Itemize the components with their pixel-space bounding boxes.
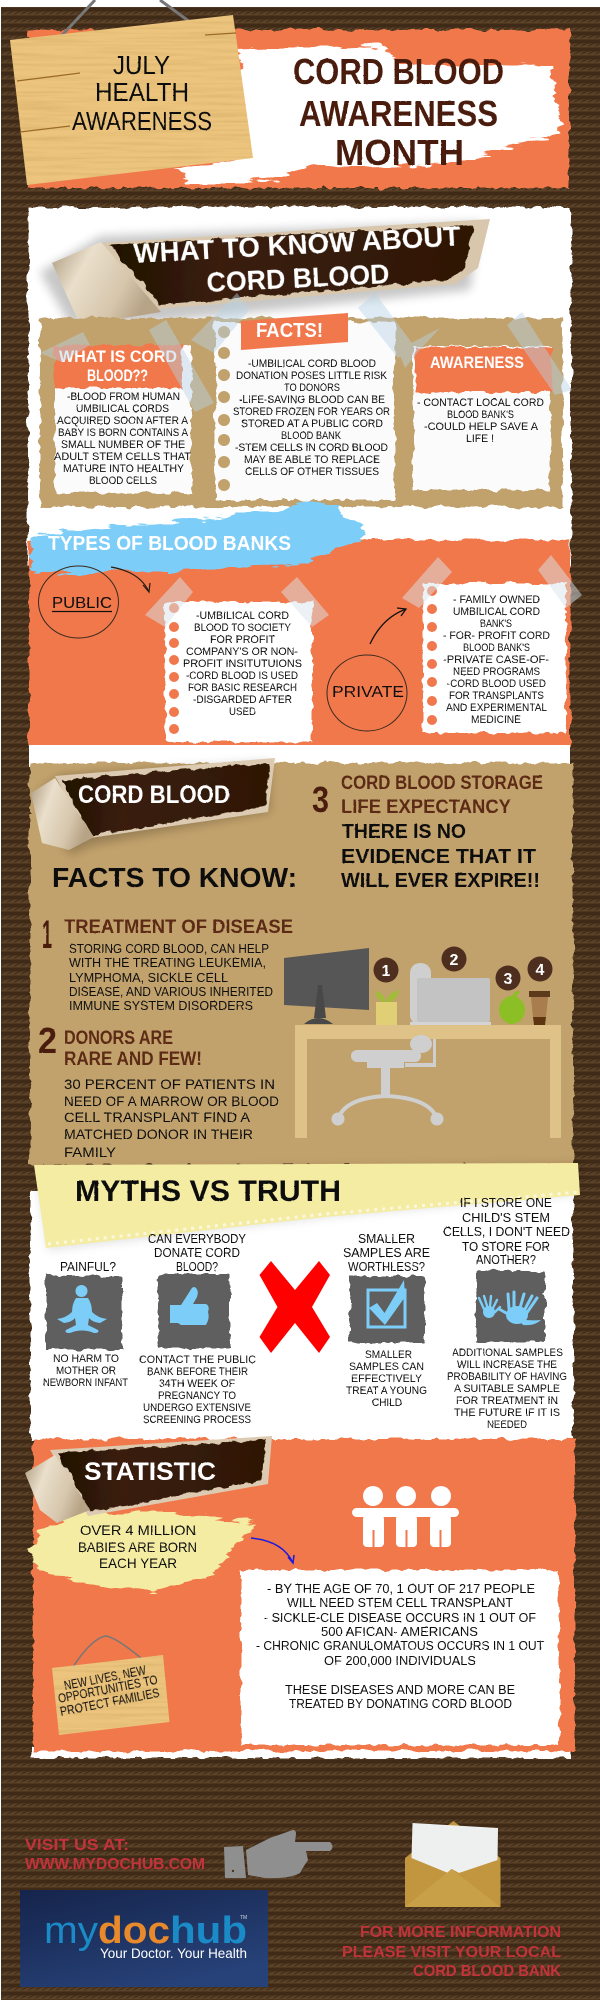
card: private: FOR TRANSPLANTS (449, 690, 544, 702)
small wooden sign: PROTECT FAMILIES (59, 1686, 161, 1719)
public circle (38, 566, 118, 638)
myth 4: one child's stem cells (443, 1195, 570, 1431)
tapes on private card (402, 555, 582, 608)
yellow notepaper heading: MYTHS VS TRUTH (75, 1175, 341, 1208)
myth 3: smaller samples: SAMPLES CAN (349, 1361, 424, 1373)
banner: cord blood: CORD BLOOD (78, 781, 230, 809)
card: what is cord blood: ACQUIRED SOON AFTER A (57, 415, 189, 427)
panel: statistics box: - CHRONIC GRANULOMATOUS OCCURS IN 1 OUT (256, 1638, 544, 1653)
myth 2: can everybody donate: CONTACT THE PUBLIC (139, 1354, 256, 1366)
icon: hands (476, 1271, 545, 1342)
card: public: -DISGARDED AFTER (193, 694, 292, 706)
logo: mydochub: Your Doctor. Your Health (100, 1945, 247, 1961)
card: what is cord blood: BABY IS BORN CONTAINS A (58, 427, 189, 439)
myth 1: painful: NO HARM TO (53, 1353, 119, 1365)
card: what is cord blood: -BLOOD FROM HUMAN (67, 391, 180, 403)
card: public: USED (229, 706, 256, 718)
fact 2: donors are rare and few: CELL TRANSPLANT FIND A (64, 1109, 251, 1125)
banner heading text: WHAT TO KNOW ABOUT (133, 220, 461, 269)
panel: statistics box: WILL NEED STEM CELL TRANSPLANT (287, 1595, 513, 1610)
section: statistic (25, 1436, 575, 1758)
icon: red X (260, 1261, 330, 1353)
myth 3: smaller samples: WORTHLESS? (348, 1259, 425, 1274)
logo: mydochub: hub (170, 1910, 247, 1952)
card: private: BANK'S (480, 618, 512, 630)
card: awareness: AWARENESS (430, 353, 524, 372)
myth 4: one child's stem cells: WILL INCREASE THE (457, 1359, 557, 1371)
sign text: july health awareness: HEALTH (95, 77, 189, 107)
fact 1: treatment of disease: IMMUNE SYSTEM DISORDERS (69, 999, 253, 1013)
panel: statistics box: TREATED BY DONATING CORD BLOOD (289, 1696, 512, 1711)
card: what is cord blood: BLOOD?? (87, 366, 148, 385)
number badges: 2 (450, 952, 459, 969)
card: public: -CORD BLOOD IS USED (186, 670, 298, 682)
panel: statistics box: - SICKLE-CLE DISEASE OCCURS IN 1 OUT OF (264, 1610, 536, 1625)
desk illustration (284, 946, 561, 1138)
myth 2: can everybody donate: 34TH WEEK OF (159, 1378, 235, 1390)
icon: plant (375, 990, 399, 1025)
header white brush (172, 45, 562, 183)
myth 3: smaller samples: CHILD (372, 1397, 402, 1409)
callout: over 4 million babies: BABIES ARE BORN (78, 1539, 197, 1555)
card: facts: BLOOD BANK (281, 430, 342, 442)
myth 3: smaller samples: SMALLER (365, 1349, 412, 1361)
myth 4: one child's stem cells: TO STORE FOR (462, 1239, 550, 1254)
card: private: -CORD BLOOD USED (447, 678, 546, 690)
header panel (10, 0, 569, 188)
myth 2: can everybody donate (139, 1231, 256, 1426)
fact 3: storage life expectancy: EVIDENCE THAT IT (341, 846, 536, 868)
fact 2: donors are rare and few: DONORS ARE (64, 1028, 173, 1049)
myth 1: painful: MOTHER OR (56, 1365, 116, 1377)
blue brush heading: TYPES OF BLOOD BANKS (48, 533, 291, 555)
wooden sign (10, 0, 253, 185)
card: private: BLOOD BANK'S (463, 642, 530, 654)
title: cord blood awareness month: CORD BLOOD (293, 51, 504, 92)
card: facts: TO DONORS (284, 382, 340, 394)
myth 4: one child's stem cells: PROBABILITY OF HAVING (447, 1371, 567, 1383)
fact 1: treatment of disease: LYMPHOMA, SICKLE CELL (69, 971, 228, 985)
banner: statistic (25, 1436, 272, 1523)
card: awareness: LIFE ! (466, 433, 494, 445)
icon: checkbox (350, 1276, 425, 1343)
myth 3: smaller samples: TREAT A YOUNG (346, 1385, 427, 1397)
card: awareness: -COULD HELP SAVE A (424, 421, 539, 433)
fact 1: treatment of disease (42, 913, 293, 1013)
desk (295, 1025, 561, 1138)
tapes on public card (145, 577, 329, 627)
banner heading text: CORD BLOOD (206, 258, 390, 298)
card: facts: MAY BE ABLE TO REPLACE (244, 454, 380, 466)
callout: over 4 million babies: OVER 4 MILLION (80, 1522, 196, 1538)
white main panel (28, 207, 571, 567)
panel: statistics box (241, 1570, 559, 1745)
card: facts: -STEM CELLS IN CORD BLOOD (235, 442, 388, 454)
blue brush heading (31, 505, 367, 572)
white background (30, 1190, 573, 1440)
fact 2: donors are rare and few: FAMILY (64, 1144, 117, 1160)
callout: over 4 million babies: EACH YEAR (99, 1555, 177, 1571)
icon: apple (499, 991, 525, 1024)
panel: statistics box: THESE DISEASES AND MORE CAN BE (285, 1682, 515, 1697)
more information text: FOR MORE INFORMATION (360, 1924, 561, 1941)
visit us text (25, 1837, 205, 1873)
panel: statistics box: - BY THE AGE OF 70, 1 OUT OF 217 PEOPLE (267, 1581, 535, 1596)
more information text: CORD BLOOD BANK (413, 1963, 561, 1980)
card: private: UMBILICAL CORD (453, 606, 540, 618)
panel: statistics box: 500 AFICAN- AMERICANS (321, 1624, 478, 1639)
fact 3: storage life expectancy: THERE IS NO (342, 821, 466, 843)
card: public: PROFIT INSITUTUIONS (183, 658, 302, 670)
card: public: COMPANY'S OR NON- (186, 646, 298, 658)
yellow notepaper heading (34, 1163, 580, 1250)
logo: mydochub: my (44, 1910, 98, 1952)
small wooden sign (52, 1636, 170, 1735)
myth 4: one child's stem cells: NEEDED (487, 1419, 527, 1431)
myth 2: can everybody donate: PREGNANCY TO (158, 1390, 236, 1402)
myth 4: one child's stem cells: A SUITABLE SAMPLE (454, 1383, 560, 1395)
private circle: PRIVATE (332, 684, 404, 701)
fact 1: treatment of disease: DISEASE, AND VARIOUS INHERITED (69, 985, 273, 999)
card: facts: STORED FROZEN FOR YEARS OR (233, 406, 390, 418)
icon: coffee cup (529, 991, 550, 1025)
card: public: BLOOD TO SOCIETY (194, 622, 292, 634)
arrow: private to card (370, 608, 406, 644)
fact 3: storage life expectancy: 3 (312, 779, 329, 820)
panel: tan facts board (40, 293, 572, 507)
visit us text: VISIT US AT: (25, 1837, 129, 1854)
number badges (374, 946, 552, 990)
card: what is cord blood: BLOOD CELLS (89, 475, 157, 487)
fact 2: donors are rare and few: MATCHED DONOR IN THEIR (64, 1126, 253, 1142)
white bottom edge (31, 1745, 571, 1758)
card: public: FOR BASIC RESEARCH (188, 682, 297, 694)
white strip (29, 745, 570, 767)
myth 3: smaller samples: SAMPLES ARE (343, 1245, 430, 1260)
card: private (423, 583, 566, 733)
card: private: - FOR- PROFIT CORD (443, 630, 550, 642)
myth 2: can everybody donate: SCREENING PROCESS (143, 1414, 251, 1426)
myth 1: painful (43, 1259, 128, 1389)
myth 4: one child's stem cells: IF I STORE ONE (460, 1195, 552, 1210)
title: cord blood awareness month: MONTH (335, 132, 464, 173)
fact 1: treatment of disease: WITH THE TREATING LEUKEMIA, (69, 956, 266, 970)
fact 1: treatment of disease: TREATMENT OF DISEASE (64, 917, 293, 938)
card: private: NEED PROGRAMS (453, 666, 540, 678)
fact 3: storage life expectancy: CORD BLOOD STORAGE (341, 773, 543, 794)
card: what is cord blood: WHAT IS CORD (59, 347, 177, 366)
heading: facts to know: FACTS TO KNOW: (52, 862, 297, 893)
myth 4: one child's stem cells: CHILD'S STEM (462, 1210, 550, 1225)
section: types of blood banks (29, 505, 582, 747)
myth 3: smaller samples (343, 1231, 430, 1409)
myth 4: one child's stem cells: CELLS, I DON'T NEED (443, 1224, 570, 1239)
visit us text: WWW.MYDOCHUB.COM (25, 1856, 205, 1873)
orange background (33, 1439, 575, 1751)
panel: statistics box: OF 200,000 INDIVIDUALS (324, 1653, 476, 1668)
title: cord blood awareness month (293, 51, 504, 173)
more information text (342, 1924, 561, 1980)
myth 1: painful: PAINFUL? (60, 1259, 116, 1274)
small wooden sign: NEW LIVES, NEW (63, 1663, 147, 1693)
card: awareness (413, 346, 552, 490)
myth 3: smaller samples: SMALLER (358, 1231, 415, 1246)
notebook holes (218, 326, 230, 491)
more information text: PLEASE VISIT YOUR LOCAL (342, 1944, 561, 1961)
fact 1: treatment of disease: STORING CORD BLOOD, CAN HELP (69, 942, 269, 956)
arrow: blue (251, 1538, 294, 1563)
card: private: - FAMILY OWNED (453, 594, 540, 606)
fact 3: storage life expectancy: LIFE EXPECTANCY (341, 797, 511, 818)
card: awareness: - CONTACT LOCAL CORD (417, 397, 544, 409)
title: cord blood awareness month: AWARENESS (299, 93, 498, 134)
icon: three people (352, 1486, 459, 1548)
card: public: -UMBILICAL CORD (196, 610, 289, 622)
card: private: AND EXPERIMENTAL (446, 702, 547, 714)
card: what is cord blood (54, 345, 191, 493)
icon: meditation (46, 1276, 122, 1350)
yellow brush (29, 1512, 256, 1593)
card: what is cord blood: MATURE INTO HEALTHY (63, 463, 185, 475)
callout: over 4 million babies (78, 1522, 197, 1571)
banner: statistic: STATISTIC (84, 1458, 216, 1486)
myth 3: smaller samples: EFFECTIVELY (351, 1373, 423, 1385)
logo: mydochub: doc (98, 1910, 170, 1952)
chair (332, 1035, 444, 1126)
sign text: july health awareness: AWARENESS (72, 106, 212, 136)
card: what is cord blood: SMALL NUMBER OF THE (61, 439, 185, 451)
card: facts (215, 313, 394, 500)
orange background (29, 540, 570, 747)
sign text: july health awareness: JULY (113, 50, 170, 80)
banner: what to know about cord blood (40, 219, 490, 325)
fact 2: donors are rare and few: 30 PERCENT OF PATIENTS IN (64, 1076, 275, 1092)
myth 1: painful: NEWBORN INFANT (43, 1377, 128, 1389)
fact 3: storage life expectancy (312, 773, 543, 892)
banner: cord blood (31, 758, 275, 855)
card: public: FOR PROFIT (210, 634, 275, 646)
myth 2: can everybody donate: DONATE CORD (154, 1245, 240, 1260)
myth 2: can everybody donate: CAN EVERYBODY (148, 1231, 246, 1246)
number badges: 4 (536, 962, 545, 979)
fact 1: treatment of disease: 1 (42, 913, 52, 957)
card: what is cord blood: UMBILICAL CORDS (76, 403, 169, 415)
card: private: MEDICINE (471, 714, 521, 726)
header orange brush (28, 30, 569, 188)
myth 2: can everybody donate: BLOOD? (176, 1259, 218, 1274)
sign text: july health awareness (72, 50, 212, 136)
footer (20, 1821, 561, 1987)
myth 4: one child's stem cells: FOR TREATMENT IN (456, 1395, 558, 1407)
card: what is cord blood: ADULT STEM CELLS THAT (54, 451, 191, 463)
card: facts: CELLS OF OTHER TISSUES (245, 466, 379, 478)
facts tag (241, 313, 348, 350)
logo: mydochub: TM (240, 1915, 247, 1921)
myth 2: can everybody donate: BANK BEFORE THEIR (147, 1366, 248, 1378)
myth 4: one child's stem cells: ADDITIONAL SAMPLES (452, 1347, 563, 1359)
fact 3: storage life expectancy: WILL EVER EXPIRE!! (341, 870, 540, 892)
card: private: -PRIVATE CASE-OF- (443, 654, 549, 666)
section: cord blood facts tan (30, 758, 573, 1165)
monitor (284, 948, 369, 1024)
myth 2: can everybody donate: UNDERGO EXTENSIVE (143, 1402, 251, 1414)
card: facts: DONATION POSES LITTLE RISK (236, 370, 388, 382)
logo: mydochub (20, 1890, 268, 1987)
private circle (327, 655, 407, 731)
small wooden sign: OPPORTUNITIES TO (57, 1673, 159, 1706)
facts tag: FACTS! (256, 320, 323, 342)
fact 2: donors are rare and few: NEED OF A MARROW OR BLOOD (64, 1093, 279, 1109)
icon: envelope (405, 1821, 500, 1907)
fact 2: donors are rare and few: RARE AND FEW! (64, 1049, 202, 1070)
card: facts: -UMBILICAL CORD BLOOD (248, 358, 376, 370)
icon: thumbs up (158, 1274, 230, 1348)
banner heading text (133, 220, 461, 298)
number badges: 1 (382, 963, 391, 980)
myth 4: one child's stem cells: THE FUTURE IF IT IS (454, 1407, 560, 1419)
fact 2: donors are rare and few (38, 1020, 279, 1160)
icon: computer (410, 963, 491, 1025)
card: public (165, 602, 312, 742)
myth 4: one child's stem cells: ANOTHER? (476, 1252, 536, 1267)
icon: pointing hand (224, 1830, 332, 1878)
fact 2: donors are rare and few: 2 (38, 1020, 57, 1061)
section: myths vs truth (30, 1163, 580, 1440)
card: facts: STORED AT A PUBLIC CORD (241, 418, 383, 430)
number badges: 3 (504, 971, 513, 988)
arrow: public to card (111, 567, 150, 592)
card: facts: -LIFE-SAVING BLOOD CAN BE (239, 394, 385, 406)
public circle: PUBLIC (52, 595, 112, 612)
card: awareness: BLOOD BANK'S (447, 409, 514, 421)
translucent tapes (40, 293, 572, 412)
